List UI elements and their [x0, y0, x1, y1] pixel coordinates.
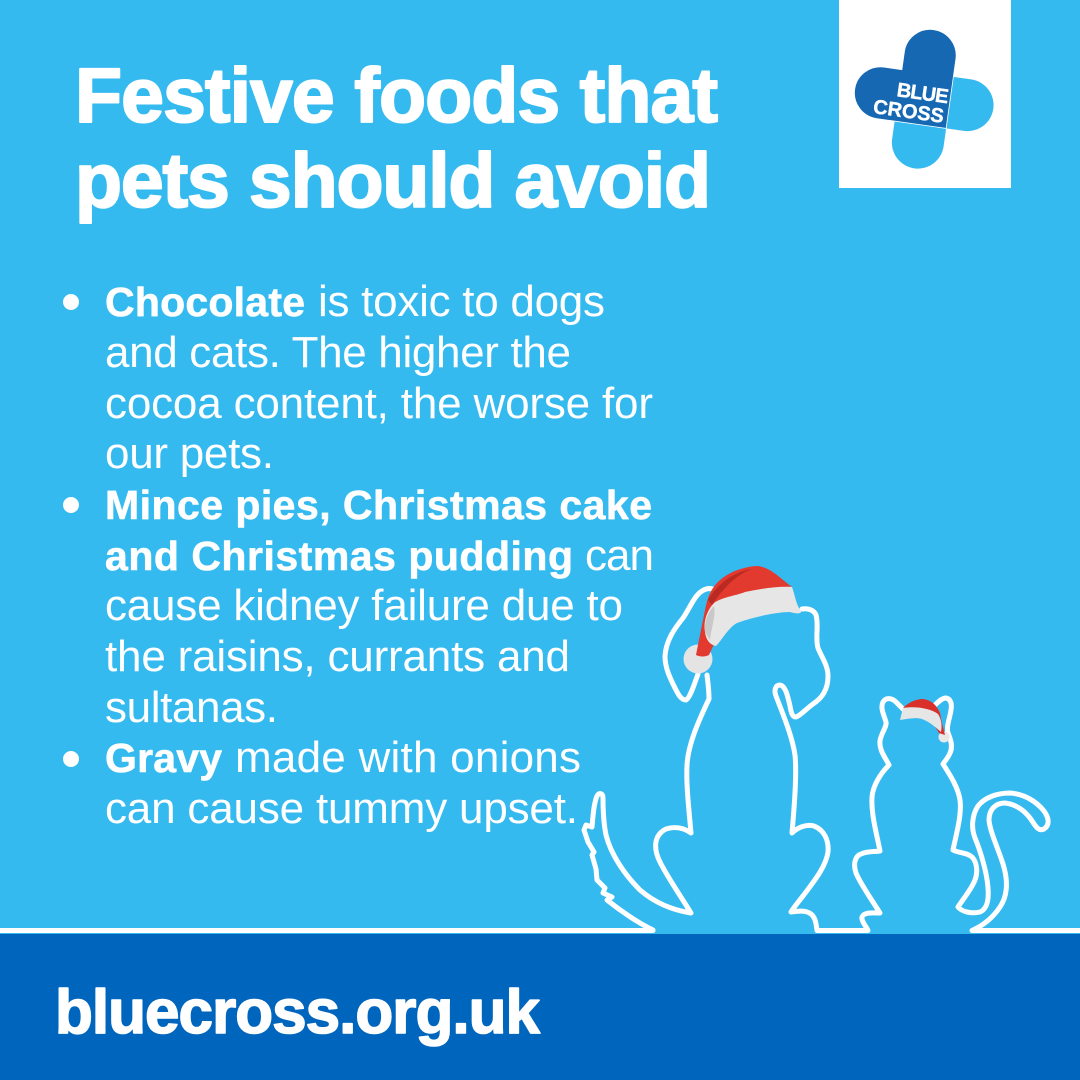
title: pets should avoid: [75, 138, 711, 224]
bullet: gravy: [63, 733, 581, 833]
footer url: bluecross.org.uk: [55, 978, 541, 1047]
bullet: mince pies: [63, 482, 654, 732]
footer band: [0, 934, 1080, 1080]
bullet: gravy: Gravy: [105, 735, 222, 781]
logo: Blue Cross: CROSS: [872, 96, 945, 128]
bullet: mince pies: and Christmas pudding: [105, 533, 573, 579]
logo: Blue Cross: [839, 0, 1011, 188]
bullet: gravy: can cause tummy upset.: [105, 784, 578, 833]
title: [75, 53, 718, 224]
dog outline: [584, 675, 709, 930]
bullet: mince pies: can: [585, 531, 654, 580]
ground line left: [0, 928, 653, 933]
bullet: chocolate: Chocolate: [105, 279, 305, 325]
icon: cat santa hat: [900, 699, 950, 742]
bullet: mince pies: Mince pies, Christmas cake: [105, 482, 652, 528]
bullet: mince pies: the raisins, currants and: [105, 632, 570, 681]
illustration: dog and cat outline: [0, 589, 1080, 930]
bullet: gravy: made with onions: [235, 733, 581, 782]
cat outline: [817, 699, 904, 930]
bullet: chocolate: our pets.: [105, 429, 274, 478]
bullet: mince pies: sultanas.: [105, 683, 278, 732]
bullet: chocolate: and cats. The higher the: [105, 328, 571, 377]
bullet: chocolate: is toxic to dogs: [318, 277, 605, 326]
bullet: mince pies: cause kidney failure due to: [105, 581, 623, 630]
logo: Blue Cross: BLUE: [895, 79, 950, 108]
bullet list: [63, 277, 654, 833]
icon: dog santa hat: [684, 566, 801, 674]
bullet: chocolate: [63, 277, 653, 478]
title: Festive foods that: [75, 53, 718, 139]
bullet: chocolate: cocoa content, the worse for: [105, 379, 653, 428]
